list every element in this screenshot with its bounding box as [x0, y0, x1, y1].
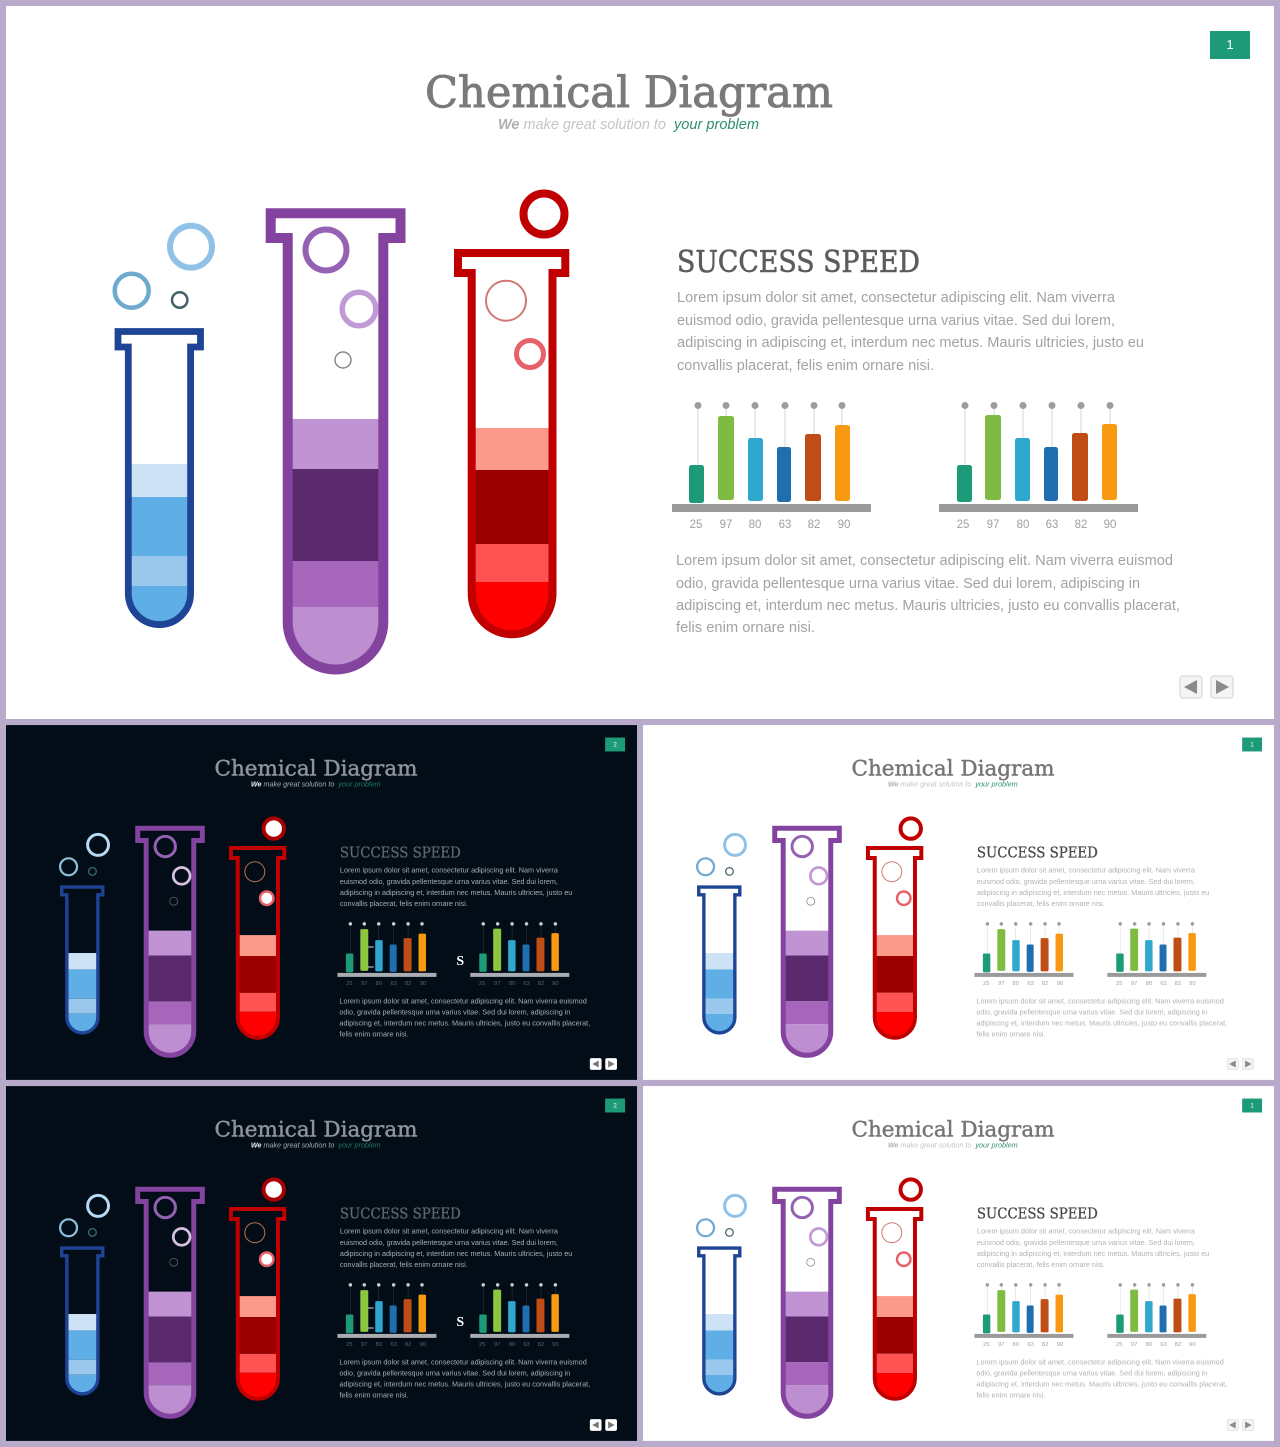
bar chart: left: 25: [346, 981, 353, 987]
text block: lower paragraph: felis enim ornare nisi.: [976, 1391, 1046, 1400]
icon: blue test tube: [60, 1195, 109, 1394]
subtitle: We make great solution to: [498, 117, 666, 133]
bar chart: right: 63: [1046, 519, 1058, 531]
bar chart: left: 82: [405, 981, 411, 987]
bar chart: left: [974, 1283, 1073, 1348]
bar chart: left: 82: [405, 1342, 411, 1348]
bar chart: left: 80: [376, 1342, 382, 1348]
title: Chemical Diagram: [852, 756, 1055, 781]
bar chart: left: [974, 922, 1073, 987]
text block: upper paragraph: Lorem ipsum dolor sit amet, consectetur adipiscing elit. Nam viverra: [977, 865, 1195, 874]
subtitle: [251, 779, 381, 788]
bar chart: left: 63: [1027, 981, 1034, 987]
icon: previous and next arrows: [1227, 1059, 1254, 1069]
subtitle: your problem: [337, 1140, 381, 1149]
icon: blue test tube: [60, 834, 109, 1033]
text block: upper paragraph: convallis placerat, felis enim ornare nisi.: [677, 358, 934, 374]
heading: SUCCESS SPEED: [977, 843, 1098, 861]
bar chart: right: 90: [1104, 519, 1116, 531]
text block: lower paragraph: Lorem ipsum dolor sit amet, consectetur adipiscing elit. Nam viverra euismod: [976, 996, 1224, 1005]
bar chart: left: 82: [808, 519, 820, 531]
bar chart: right: 97: [1131, 981, 1137, 987]
text block: lower paragraph: adipiscing et, interdum nec metus. Mauris ultricies, justo eu convallis placerat,: [339, 1380, 590, 1389]
icon: previous and next arrows: [1180, 676, 1233, 698]
title: Chemical Diagram: [425, 68, 833, 118]
subtitle: your problem: [673, 117, 759, 133]
heading: SUCCESS SPEED: [977, 1204, 1098, 1222]
text block: upper paragraph: [340, 1226, 572, 1269]
bar chart: right: 97: [987, 519, 999, 531]
text block: lower paragraph: [339, 996, 590, 1039]
text block: upper paragraph: Lorem ipsum dolor sit amet, consectetur adipiscing elit. Nam viverra: [340, 865, 558, 874]
page number badge: 1: [1226, 37, 1234, 52]
subtitle: your problem: [337, 779, 381, 788]
slide 1: main light slide: [6, 6, 1274, 719]
subtitle: your problem: [974, 779, 1018, 788]
text block: lower paragraph: odio, gravida pellentesque urna varius vitae. Sed dui lorem, adipiscing in: [976, 1008, 1207, 1017]
text block: upper paragraph: Lorem ipsum dolor sit amet, consectetur adipiscing elit. Nam viverra: [677, 290, 1116, 306]
icon: red test tube: [868, 1179, 921, 1399]
icon: purple test tube: [775, 828, 839, 1055]
page number badge: 2: [613, 1102, 617, 1109]
bar chart: right: 82: [538, 1342, 544, 1348]
text block: lower paragraph: odio, gravida pellentesque urna varius vitae. Sed dui lorem, adipiscing in: [976, 1369, 1207, 1378]
bar chart: right: 25: [1116, 1342, 1122, 1348]
icon: blue test tube: [697, 834, 746, 1033]
slide 3: light thumbnail: [643, 725, 1274, 1080]
icon: previous and next arrows: [1227, 1420, 1254, 1430]
bar chart: left: 90: [838, 519, 850, 531]
bar chart: left: 63: [1027, 1342, 1034, 1348]
text block: upper paragraph: adipiscing in adipiscing et, interdum nec metus. Mauris ultricies, justo eu: [677, 335, 1144, 351]
bar chart: right: [1107, 1283, 1206, 1348]
bar chart: right: 63: [1160, 981, 1167, 987]
bar chart: right: 80: [1017, 519, 1029, 531]
text block: lower paragraph: Lorem ipsum dolor sit amet, consectetur adipiscing elit. Nam viverra euismod: [976, 1357, 1224, 1366]
text block: upper paragraph: convallis placerat, felis enim ornare nisi.: [977, 1260, 1105, 1269]
bar chart: right: 25: [479, 981, 485, 987]
page number badge: 2: [613, 741, 617, 748]
bar chart: left: 63: [779, 519, 791, 531]
subtitle: We make great solution to: [251, 779, 334, 788]
bar chart: right: 82: [1175, 981, 1181, 987]
bar chart: left: 25: [983, 1342, 990, 1348]
text block: upper paragraph: convallis placerat, felis enim ornare nisi.: [340, 899, 468, 908]
bar chart: right: 90: [1189, 1342, 1196, 1348]
bar chart: right: 82: [1175, 1342, 1181, 1348]
bar chart: right: 82: [538, 981, 544, 987]
text block: lower paragraph: adipiscing et, interdum nec metus. Mauris ultricies, justo eu convallis placerat,: [339, 1019, 590, 1028]
bar chart: right: 25: [957, 519, 969, 531]
text block: upper paragraph: euismod odio, gravida pellentesque urna varius vitae. Sed dui lorem,: [340, 877, 558, 886]
text block: upper paragraph: euismod odio, gravida pellentesque urna varius vitae. Sed dui lorem,: [677, 313, 1115, 329]
heading: SUCCESS SPEED: [340, 1204, 461, 1222]
bar chart: left: 80: [1013, 981, 1019, 987]
bar chart: left: 90: [1057, 981, 1063, 987]
bar chart: right: 80: [509, 1342, 515, 1348]
bar chart: right: 63: [523, 1342, 530, 1348]
subtitle: your problem: [974, 1140, 1018, 1149]
bar chart: right: 97: [1131, 1342, 1137, 1348]
bar chart: left: 25: [983, 981, 990, 987]
text block: upper paragraph: euismod odio, gravida pellentesque urna varius vitae. Sed dui lorem,: [977, 877, 1195, 886]
text block: upper paragraph: convallis placerat, felis enim ornare nisi.: [977, 899, 1105, 908]
text block: lower paragraph: Lorem ipsum dolor sit amet, consectetur adipiscing elit. Nam viverra euismod: [339, 996, 587, 1005]
icon: red test tube: [231, 1179, 284, 1399]
bar chart: left: [337, 922, 436, 987]
page number badge: 1: [1250, 741, 1254, 748]
text block: lower paragraph: Lorem ipsum dolor sit amet, consectetur adipiscing elit. Nam viverra euismod: [339, 1357, 587, 1366]
bar chart: left: [337, 1283, 436, 1348]
bar chart: left: 97: [998, 981, 1004, 987]
text block: lower paragraph: adipiscing et, interdum nec metus. Mauris ultricies, justo eu convallis placerat,: [976, 1380, 1227, 1389]
page number badge: [1242, 738, 1262, 751]
page number badge: [605, 1099, 625, 1112]
bar chart: right: 80: [1146, 1342, 1152, 1348]
text block: lower paragraph: felis enim ornare nisi.: [976, 1030, 1046, 1039]
bar chart: left: 97: [361, 1342, 367, 1348]
page number badge: [1210, 31, 1250, 59]
text block: lower paragraph: felis enim ornare nisi.: [339, 1391, 409, 1400]
text block: upper paragraph: convallis placerat, felis enim ornare nisi.: [340, 1260, 468, 1269]
bar chart: left: 25: [346, 1342, 353, 1348]
text block: upper paragraph: adipiscing in adipiscing et, interdum nec metus. Mauris ultricies, justo eu: [340, 1249, 572, 1258]
bar chart: right: 80: [509, 981, 515, 987]
icon: red test tube: [868, 818, 921, 1038]
title: Chemical Diagram: [215, 756, 418, 781]
text block: lower paragraph: felis enim ornare nisi.: [339, 1030, 409, 1039]
bar chart: left: 97: [998, 1342, 1004, 1348]
bar chart: left: 82: [1042, 981, 1048, 987]
text block: upper paragraph: [977, 1226, 1209, 1269]
text block: lower paragraph: odio, gravida pellentesque urna varius vitae. Sed dui lorem, adipiscing in: [676, 576, 1140, 592]
subtitle: [498, 117, 759, 133]
text block: lower paragraph: [339, 1357, 590, 1400]
bar chart: right: 97: [494, 1342, 500, 1348]
icon: purple test tube: [271, 213, 400, 670]
text block: lower paragraph: [976, 1357, 1227, 1400]
icon: blue test tube: [115, 226, 212, 625]
subtitle: We make great solution to: [251, 1140, 334, 1149]
text block: lower paragraph: adipiscing et, interdum nec metus. Mauris ultricies, justo eu convallis placerat,: [676, 598, 1180, 614]
heading: SUCCESS SPEED: [677, 245, 920, 280]
bar chart: right: 97: [494, 981, 500, 987]
bar chart: left: 97: [361, 981, 367, 987]
text block: lower paragraph: Lorem ipsum dolor sit amet, consectetur adipiscing elit. Nam viverra euismod: [676, 553, 1173, 569]
text block: upper paragraph: Lorem ipsum dolor sit amet, consectetur adipiscing elit. Nam viverra: [340, 1226, 558, 1235]
title: Chemical Diagram: [852, 1117, 1055, 1142]
icon: previous and next arrows: [590, 1059, 617, 1069]
bar chart: left: 80: [1013, 1342, 1019, 1348]
bar chart: left: 97: [720, 519, 732, 531]
stray letter: S: [456, 954, 464, 969]
bar chart: right: 90: [1189, 981, 1196, 987]
heading: SUCCESS SPEED: [340, 843, 461, 861]
bar chart: right: 25: [479, 1342, 485, 1348]
bar chart: left: 82: [1042, 1342, 1048, 1348]
text block: upper paragraph: [677, 290, 1144, 374]
subtitle: [888, 779, 1018, 788]
bar chart: left: 80: [749, 519, 761, 531]
bar chart: left: 63: [390, 981, 397, 987]
text block: upper paragraph: adipiscing in adipiscing et, interdum nec metus. Mauris ultricies, justo eu: [340, 888, 572, 897]
subtitle: [251, 1140, 381, 1149]
stray letter: S: [456, 1315, 464, 1330]
bar chart: right: [1107, 922, 1206, 987]
slide 4: dark thumbnail: [6, 1086, 637, 1441]
text block: lower paragraph: felis enim ornare nisi.: [676, 620, 815, 636]
page number badge: [1242, 1099, 1262, 1112]
page number badge: 1: [1250, 1102, 1254, 1109]
icon: purple test tube: [138, 828, 202, 1055]
text block: lower paragraph: [976, 996, 1227, 1039]
page number badge: [605, 738, 625, 751]
slide 2: dark thumbnail: [6, 725, 637, 1080]
bar chart: right: [470, 922, 569, 987]
subtitle: We make great solution to: [888, 779, 971, 788]
icon: previous and next arrows: [590, 1420, 617, 1430]
icon: red test tube: [231, 818, 284, 1038]
text block: upper paragraph: [340, 865, 572, 908]
subtitle: [888, 1140, 1018, 1149]
text block: lower paragraph: [676, 553, 1180, 636]
bar chart: right: 90: [552, 1342, 559, 1348]
bar chart: right: 63: [523, 981, 530, 987]
text block: lower paragraph: odio, gravida pellentesque urna varius vitae. Sed dui lorem, adipiscing in: [339, 1369, 570, 1378]
text block: upper paragraph: euismod odio, gravida pellentesque urna varius vitae. Sed dui lorem,: [977, 1238, 1195, 1247]
icon: red test tube: [458, 194, 565, 634]
bar chart: right: 90: [552, 981, 559, 987]
text block: upper paragraph: adipiscing in adipiscing et, interdum nec metus. Mauris ultricies, justo eu: [977, 888, 1209, 897]
slide 5: light thumbnail: [643, 1086, 1274, 1441]
icon: purple test tube: [775, 1189, 839, 1416]
bar chart: right: [470, 1283, 569, 1348]
text block: upper paragraph: euismod odio, gravida pellentesque urna varius vitae. Sed dui lorem,: [340, 1238, 558, 1247]
bar chart: left: 90: [420, 1342, 426, 1348]
text block: upper paragraph: adipiscing in adipiscing et, interdum nec metus. Mauris ultricies, justo eu: [977, 1249, 1209, 1258]
icon: purple test tube: [138, 1189, 202, 1416]
bar chart: left: 25: [690, 519, 702, 531]
bar chart: right: 25: [1116, 981, 1122, 987]
text block: lower paragraph: odio, gravida pellentesque urna varius vitae. Sed dui lorem, adipiscing in: [339, 1008, 570, 1017]
text block: lower paragraph: adipiscing et, interdum nec metus. Mauris ultricies, justo eu convallis placerat,: [976, 1019, 1227, 1028]
bar chart: left: 90: [1057, 1342, 1063, 1348]
text block: upper paragraph: Lorem ipsum dolor sit amet, consectetur adipiscing elit. Nam viverra: [977, 1226, 1195, 1235]
icon: blue test tube: [697, 1195, 746, 1394]
subtitle: We make great solution to: [888, 1140, 971, 1149]
bar chart: right: 82: [1075, 519, 1087, 531]
title: Chemical Diagram: [215, 1117, 418, 1142]
bar chart: right: 80: [1146, 981, 1152, 987]
text block: upper paragraph: [977, 865, 1209, 908]
bar chart: right: [939, 402, 1138, 531]
bar chart: left: [672, 402, 871, 531]
bar chart: left: 80: [376, 981, 382, 987]
bar chart: left: 90: [420, 981, 426, 987]
bar chart: right: 63: [1160, 1342, 1167, 1348]
bar chart: left: 63: [390, 1342, 397, 1348]
